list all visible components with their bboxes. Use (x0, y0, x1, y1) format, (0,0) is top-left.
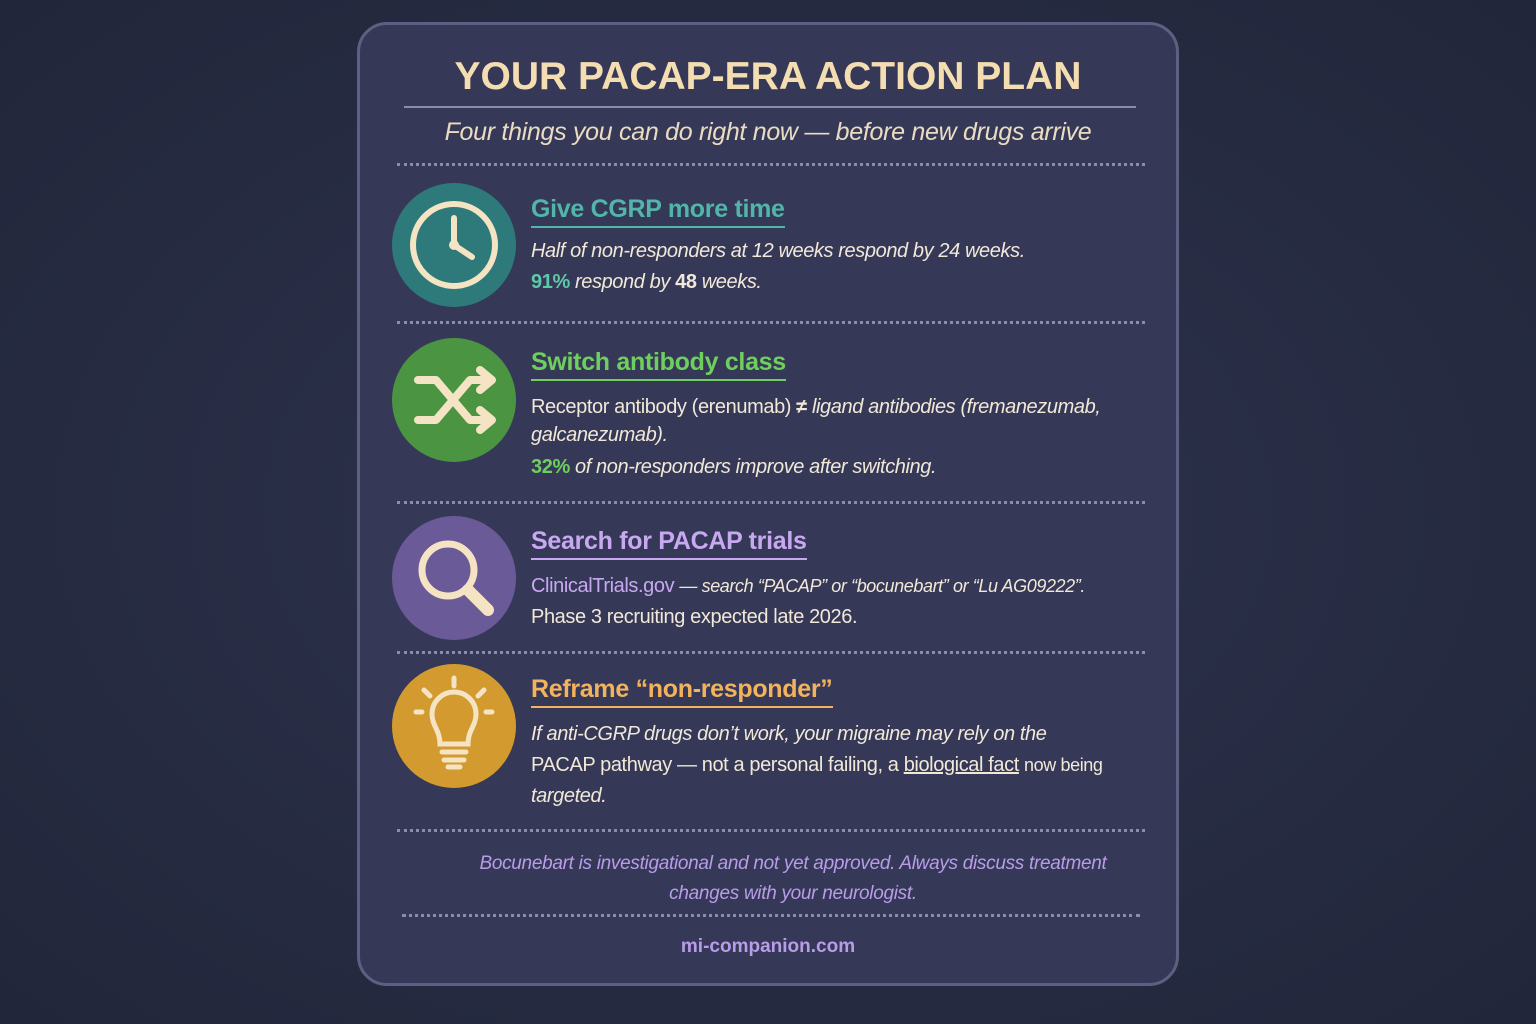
step 1: Give CGRP more time (392, 183, 1025, 307)
text: PACAP pathway — not a personal failing, a biological fact now being (531, 754, 1103, 776)
icon: clock (392, 183, 516, 307)
text: Phase 3 recruiting expected late 2026. (531, 606, 857, 628)
heading: Switch antibody class (531, 348, 786, 376)
text: targeted. (531, 785, 606, 807)
title: YOUR PACAP-ERA ACTION PLAN (455, 55, 1081, 98)
text: If anti-CGRP drugs don’t work, your migraine may rely on the (531, 723, 1046, 745)
footer url: mi-companion.com (681, 936, 855, 957)
heading: Give CGRP more time (531, 195, 785, 223)
text: galcanezumab). (531, 424, 668, 446)
icon: magnifier (392, 516, 516, 640)
text: ClinicalTrials.gov — search “PACAP” or “bocunebart” or “Lu AG09222”. (531, 575, 1085, 597)
text: Receptor antibody (erenumab) ≠ ligand antibodies (fremanezumab, (531, 396, 1100, 418)
subtitle: Four things you can do right now — before new drugs arrive (445, 118, 1091, 146)
step 2: Switch antibody class (392, 338, 1100, 478)
step 4: Reframe non-responder (392, 664, 1103, 807)
heading: Reframe “non-responder” (531, 675, 832, 703)
icon: lightbulb (392, 664, 516, 788)
disclaimer: Bocunebart is investigational and not yet approved. Always discuss treatment changes with your neurologist. (479, 853, 1107, 904)
text: 32% of non-responders improve after switching. (531, 456, 936, 478)
heading: Search for PACAP trials (531, 527, 807, 555)
text: 91% respond by 48 weeks. (531, 271, 762, 293)
card (357, 22, 1179, 986)
text (531, 396, 1100, 478)
text (531, 575, 1085, 628)
icon: shuffle (392, 338, 516, 462)
text: Half of non-responders at 12 weeks respond by 24 weeks. (531, 240, 1025, 262)
text (531, 240, 1025, 293)
text (531, 723, 1103, 807)
step 3: Search for PACAP trials (392, 516, 1085, 640)
